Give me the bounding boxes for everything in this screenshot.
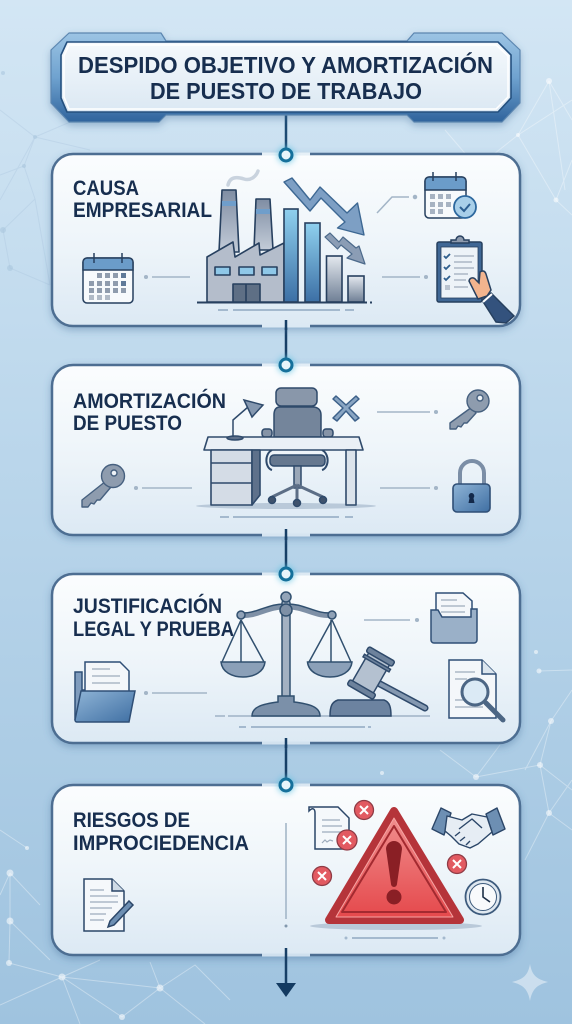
leaders [145,276,427,278]
title banner [51,33,520,122]
red x marks [312,800,466,886]
node [277,356,295,374]
icon: calendar [83,253,133,303]
leaders [135,411,437,489]
icon: gavel [330,646,425,716]
heading: justificación legal y prueba: LEGAL Y PRUEBA [73,618,234,641]
icon: clock [466,880,500,914]
icon: desk [204,437,363,505]
icon: handshake [432,808,505,848]
heading: amortización de puesto: DE PUESTO [73,412,182,435]
ground and dashes [215,716,430,727]
icon: key left [82,464,124,507]
icon: folder right [431,593,477,643]
panel: riesgos de improcedencia [52,776,520,956]
arrow: continuing downward [276,948,296,997]
heading: causa empresarial: CAUSA [73,177,139,200]
icon: folder left [75,662,135,722]
icon: warning triangle [329,811,460,920]
connector: third to fourth card [285,738,287,780]
heading: amortización de puesto [73,389,226,435]
node [277,565,295,583]
chart: falling bars [284,209,364,302]
divider [284,823,288,928]
icon: x mark [333,396,359,421]
decoration: sparkle [512,964,548,1001]
heading: riesgos de improcedencia: IMPROCIEDENCIA [73,832,249,855]
icon: contract [309,807,349,849]
heading: justificación legal y prueba [73,594,234,641]
arrow: large downward trend [284,178,364,235]
node [277,776,295,794]
shadow and dashes [310,922,482,940]
icon: clipboard with hand [437,236,514,323]
icon: document with pen [84,879,133,931]
panel: justificación legal y prueba [52,565,520,748]
exclamation mark [386,841,402,904]
icon: factory [207,171,284,302]
leader top right [377,196,416,213]
title text line 2: DE PUESTO DE TRABAJO [150,78,422,104]
heading: causa empresarial: EMPRESARIAL [73,199,212,222]
icon: document with magnifier [449,660,503,720]
icon: key top right [450,390,489,429]
arrow: small downward trend [325,233,365,264]
panel: causa empresarial [52,146,520,330]
shadow and dashes [196,503,376,517]
ground line [197,302,372,310]
icon: desk lamp [227,400,263,440]
heading: causa empresarial [73,177,212,222]
heading: riesgos de improcedencia: RIESGOS DE [73,809,190,832]
heading: justificación legal y prueba: JUSTIFICACIÓN [73,594,222,618]
leader [145,619,418,694]
icon: padlock [453,461,490,512]
heading: riesgos de improcedencia [73,809,249,855]
node [277,146,295,164]
title text: DESPIDO OBJETIVO Y AMORTIZACIÓN [78,51,493,78]
connector: second to third card [285,529,287,569]
icon: calendar with check [425,172,476,218]
connector: first to second card [285,320,287,360]
panel: amortización de puesto [52,356,520,540]
heading: amortización de puesto: AMORTIZACIÓN [73,389,226,413]
connector: title to first card [285,115,287,150]
icon: scales of justice [221,592,352,716]
icon: office chair [262,388,333,506]
